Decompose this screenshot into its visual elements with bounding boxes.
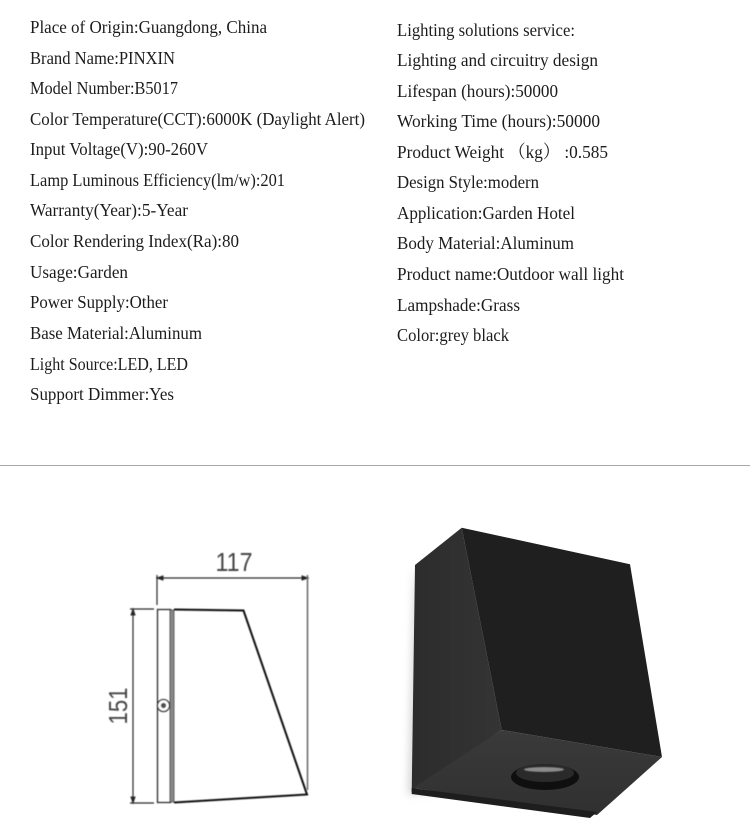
specification list: right column: Application:Garden Hotel xyxy=(397,203,575,223)
side face xyxy=(412,528,502,792)
specification list: right column: Lampshade:Grass xyxy=(397,295,520,315)
specification list: left column: Light Source:LED, LED xyxy=(30,354,188,374)
specification list: left column: Brand Name:PINXIN xyxy=(30,48,175,68)
lamp body outline xyxy=(174,610,307,802)
specification list: left column: Input Voltage(V):90-260V xyxy=(30,139,208,160)
specification list: right column xyxy=(397,20,624,345)
specification list: right column: Body Material:Aluminum xyxy=(397,233,574,253)
specification list: left column: Usage:Garden xyxy=(30,262,128,282)
specification list: right column: Lifespan (hours):50000 xyxy=(397,81,558,102)
specification list: left column: Place of Origin:Guangdong, China xyxy=(30,17,267,37)
product photo: wall light xyxy=(408,528,662,818)
specification list: left column xyxy=(30,17,365,404)
front sloped face xyxy=(462,528,662,757)
specification list: left column: Warranty(Year):5-Year xyxy=(30,200,188,221)
specification list: right column: Lighting solutions service: xyxy=(397,20,575,40)
specification list: right column: Product Weight （kg） :0.585 xyxy=(397,142,608,162)
specification list: left column: Base Material:Aluminum xyxy=(30,323,202,343)
lens xyxy=(511,764,579,790)
specification list: right column: Working Time (hours):50000 xyxy=(397,111,600,132)
bottom lip xyxy=(412,788,597,818)
specification list: left column: Model Number:B5017 xyxy=(30,78,178,98)
dimension drawing xyxy=(103,547,308,803)
section divider xyxy=(0,465,750,466)
width dimension: 117: 117 xyxy=(216,547,252,577)
specification list: left column: Color Temperature(CCT):6000K (Daylight Alert) xyxy=(30,109,365,130)
specification list: left column: Power Supply:Other xyxy=(30,292,168,312)
height dimension: 151 xyxy=(103,609,154,803)
specification list: left column: Lamp Luminous Efficiency(lm/w):201 xyxy=(30,170,285,191)
wall shadow xyxy=(408,565,450,795)
height dimension: 151: 151 xyxy=(103,688,133,724)
specification list: right column: Product name:Outdoor wall light xyxy=(397,264,624,284)
specification list: right column: Color:grey black xyxy=(397,325,509,345)
specification list: left column: Color Rendering Index(Ra):80 xyxy=(30,231,239,252)
bottom face xyxy=(413,730,662,815)
specification list: right column: Design Style:modern xyxy=(397,172,539,192)
specification list: left column: Support Dimmer:Yes xyxy=(30,384,174,404)
wall plate and screw xyxy=(158,610,174,802)
width dimension: 117 xyxy=(157,547,308,790)
specification list: right column: Lighting and circuitry design xyxy=(397,50,598,70)
